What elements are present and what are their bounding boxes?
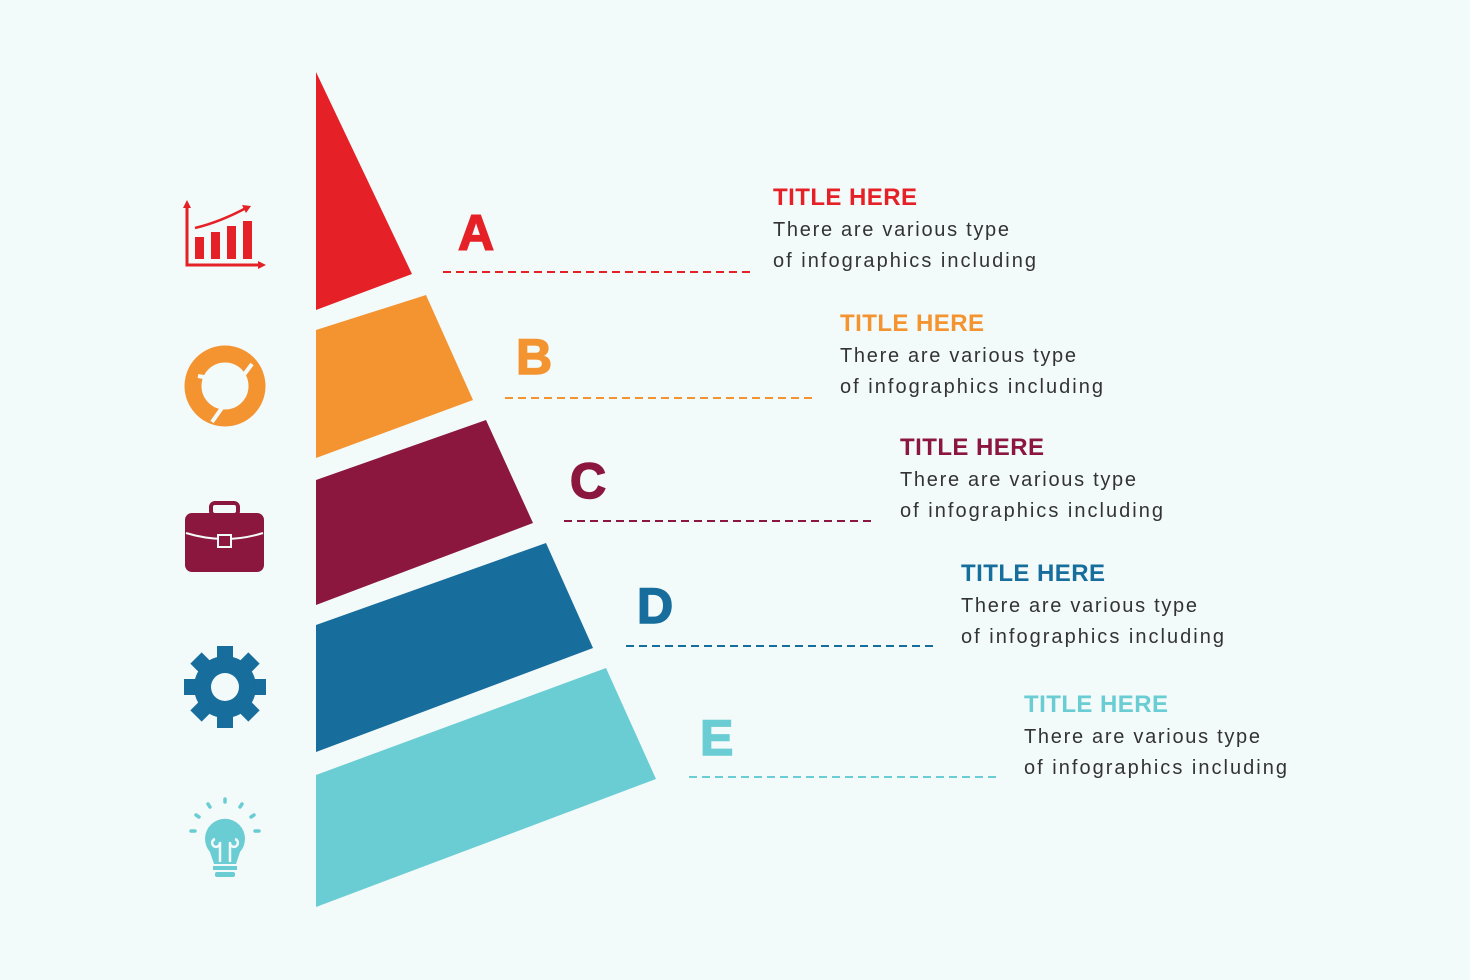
text block B: of infographics including xyxy=(840,376,1103,398)
text block D: of infographics including xyxy=(961,626,1224,648)
text block C: TITLE HERE xyxy=(900,434,1044,461)
icon: cycle xyxy=(193,354,257,422)
text block E xyxy=(1024,691,1287,779)
text block B: TITLE HERE xyxy=(840,310,984,337)
text block A xyxy=(773,184,1036,272)
text block D: TITLE HERE xyxy=(961,560,1105,587)
text block B xyxy=(840,310,1103,398)
text block E: of infographics including xyxy=(1024,757,1287,779)
tier E xyxy=(316,668,656,907)
letter B: B xyxy=(516,329,552,385)
letter C: C xyxy=(570,453,606,509)
text block C xyxy=(900,434,1163,522)
icon: light bulb xyxy=(191,799,259,877)
icon: bar chart xyxy=(183,200,266,269)
text block C: There are various type xyxy=(900,469,1136,491)
letter E: E xyxy=(700,710,733,766)
text block E: There are various type xyxy=(1024,726,1260,748)
text block D xyxy=(961,560,1224,648)
letter D: D xyxy=(637,578,673,634)
tier C xyxy=(316,420,533,605)
pyramid xyxy=(316,72,656,907)
text block D: There are various type xyxy=(961,595,1197,617)
tier D xyxy=(316,543,593,752)
text block A: of infographics including xyxy=(773,250,1036,272)
text block C: of infographics including xyxy=(900,500,1163,522)
tier B xyxy=(316,295,473,458)
text block A: There are various type xyxy=(773,219,1009,241)
text block B: There are various type xyxy=(840,345,1076,367)
text block E: TITLE HERE xyxy=(1024,691,1168,718)
tier A xyxy=(316,72,412,310)
icon: gear xyxy=(184,646,266,728)
text block A: TITLE HERE xyxy=(773,184,917,211)
icon: briefcase xyxy=(185,503,264,572)
letter A: A xyxy=(458,205,494,261)
